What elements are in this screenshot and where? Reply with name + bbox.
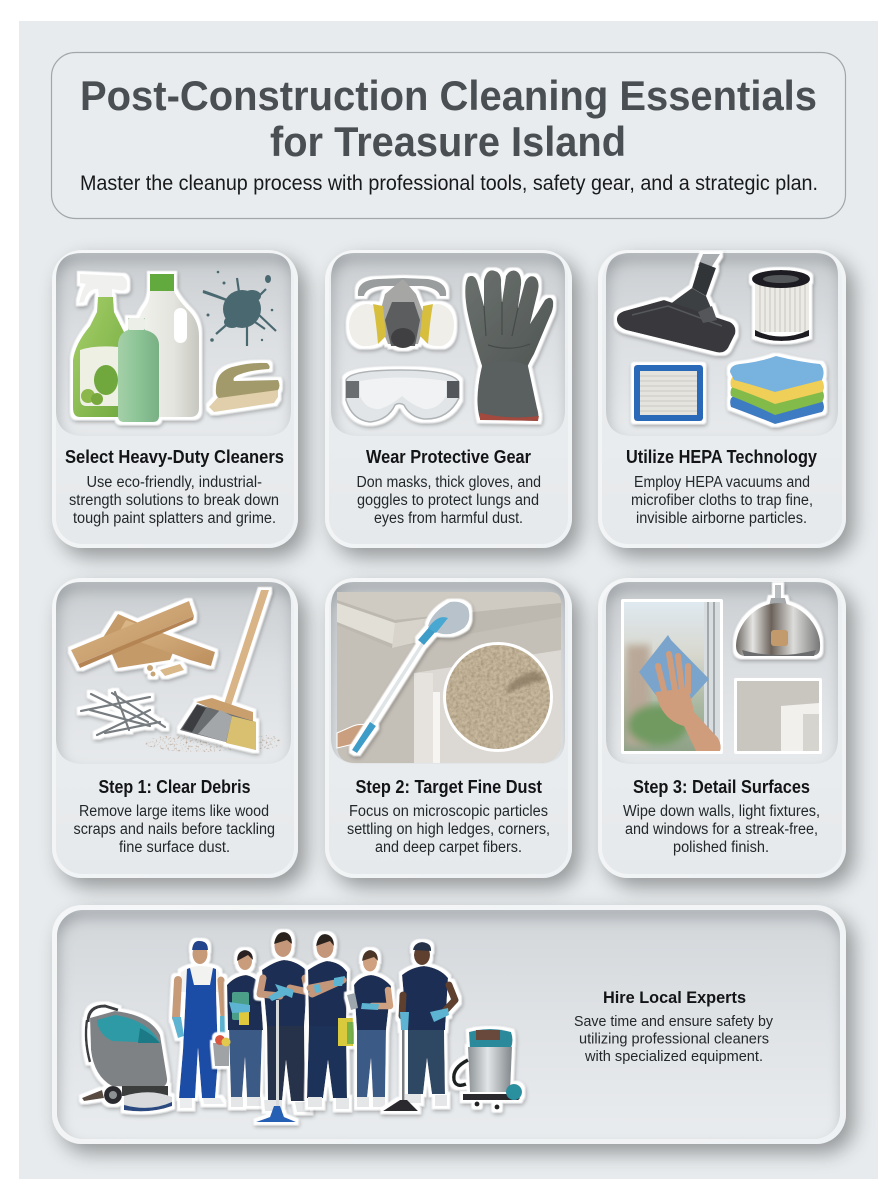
panel: step 2 target fine dust [325, 578, 572, 878]
description [347, 803, 550, 856]
icon: vacuum floor head [617, 254, 735, 352]
icon: wet-dry vacuum [454, 1029, 522, 1110]
panel: wear protective gear [325, 250, 572, 548]
carpet closeup [443, 642, 553, 752]
description: and windows for a streak-free, [625, 821, 818, 838]
person: worker in overalls [172, 941, 227, 1108]
description: Remove large items like wood [79, 803, 269, 820]
description: Focus on microscopic particles [349, 803, 548, 820]
description: eyes from harmful dust. [374, 510, 523, 527]
icon: rubber glove [465, 270, 553, 421]
panel: hire local experts [52, 905, 846, 1144]
description: utilizing professional cleaners [579, 1032, 769, 1048]
icon: nails [81, 692, 165, 735]
description: with specialized equipment. [584, 1049, 763, 1065]
heading: Step 1: Clear Debris [98, 777, 250, 797]
panel: step 1 clear debris [52, 578, 298, 878]
icon: extendable duster and hand [337, 602, 469, 753]
heading: Step 2: Target Fine Dust [356, 777, 542, 797]
description: scraps and nails before tackling [74, 821, 275, 838]
ceiling and wall photo [337, 592, 561, 763]
description: goggles to protect lungs and [357, 492, 539, 509]
description: Don masks, thick gloves, and [356, 474, 541, 491]
title: for Treasure Island [270, 118, 626, 165]
description: tough paint splatters and grime. [73, 510, 276, 527]
panel: step 3 detail surfaces [598, 578, 846, 878]
icon: broom and dust [145, 590, 281, 752]
subtitle: Master the cleanup process with professional tools, safety gear, and a strategic plan. [80, 172, 818, 195]
description: polished finish. [673, 839, 769, 856]
description [74, 803, 275, 856]
description: Wipe down walls, light fixtures, [623, 803, 820, 820]
person: worker with arms crossed [307, 934, 354, 1109]
icon: cylinder filter [753, 271, 809, 341]
description: Use eco-friendly, industrial- [86, 474, 262, 491]
description: settling on high ledges, corners, [347, 821, 550, 838]
icon: scrub brush [209, 363, 280, 412]
icon: respirator mask [349, 278, 454, 348]
description: strength solutions to break down [69, 492, 279, 509]
description [623, 803, 820, 856]
header panel [52, 52, 846, 218]
person: worker with vacuum wand [383, 942, 455, 1111]
description [631, 474, 813, 527]
icon: chrome pendant lamp [736, 585, 820, 656]
heading: Wear Protective Gear [366, 447, 531, 467]
title: Post-Construction Cleaning Essentials [80, 72, 817, 119]
window cleaning photo [621, 599, 723, 754]
icon: paint splatter [203, 271, 276, 346]
person: worker with tablet [347, 950, 391, 1107]
heading: Utilize HEPA Technology [626, 447, 817, 467]
heading: Step 3: Detail Surfaces [633, 777, 810, 797]
description: Employ HEPA vacuums and [634, 474, 810, 491]
description [574, 1014, 774, 1065]
title [80, 72, 817, 165]
person: worker with mop [256, 932, 310, 1122]
description: fine surface dust. [119, 839, 230, 856]
heading: Select Heavy-Duty Cleaners [65, 447, 284, 467]
description: and deep carpet fibers. [375, 839, 522, 856]
description: Save time and ensure safety by [574, 1014, 774, 1030]
description [356, 474, 541, 527]
icon: safety goggles [346, 370, 459, 422]
icon: stacked microfiber cloths [730, 356, 824, 424]
description [69, 474, 279, 527]
icon: floor scrubber [82, 1006, 172, 1111]
icon: wood scraps [71, 601, 215, 676]
icon: cleaning bottles [73, 274, 199, 422]
person: worker with bucket and cloth [213, 950, 263, 1107]
icon: flat HEPA filter [634, 365, 703, 421]
wall corner photo [734, 678, 822, 754]
description: microfiber cloths to trap fine, [631, 492, 813, 509]
heading: Hire Local Experts [603, 988, 746, 1007]
description: invisible airborne particles. [636, 510, 807, 527]
panel: utilize HEPA technology [598, 250, 846, 548]
panel: select heavy-duty cleaners [52, 250, 298, 548]
